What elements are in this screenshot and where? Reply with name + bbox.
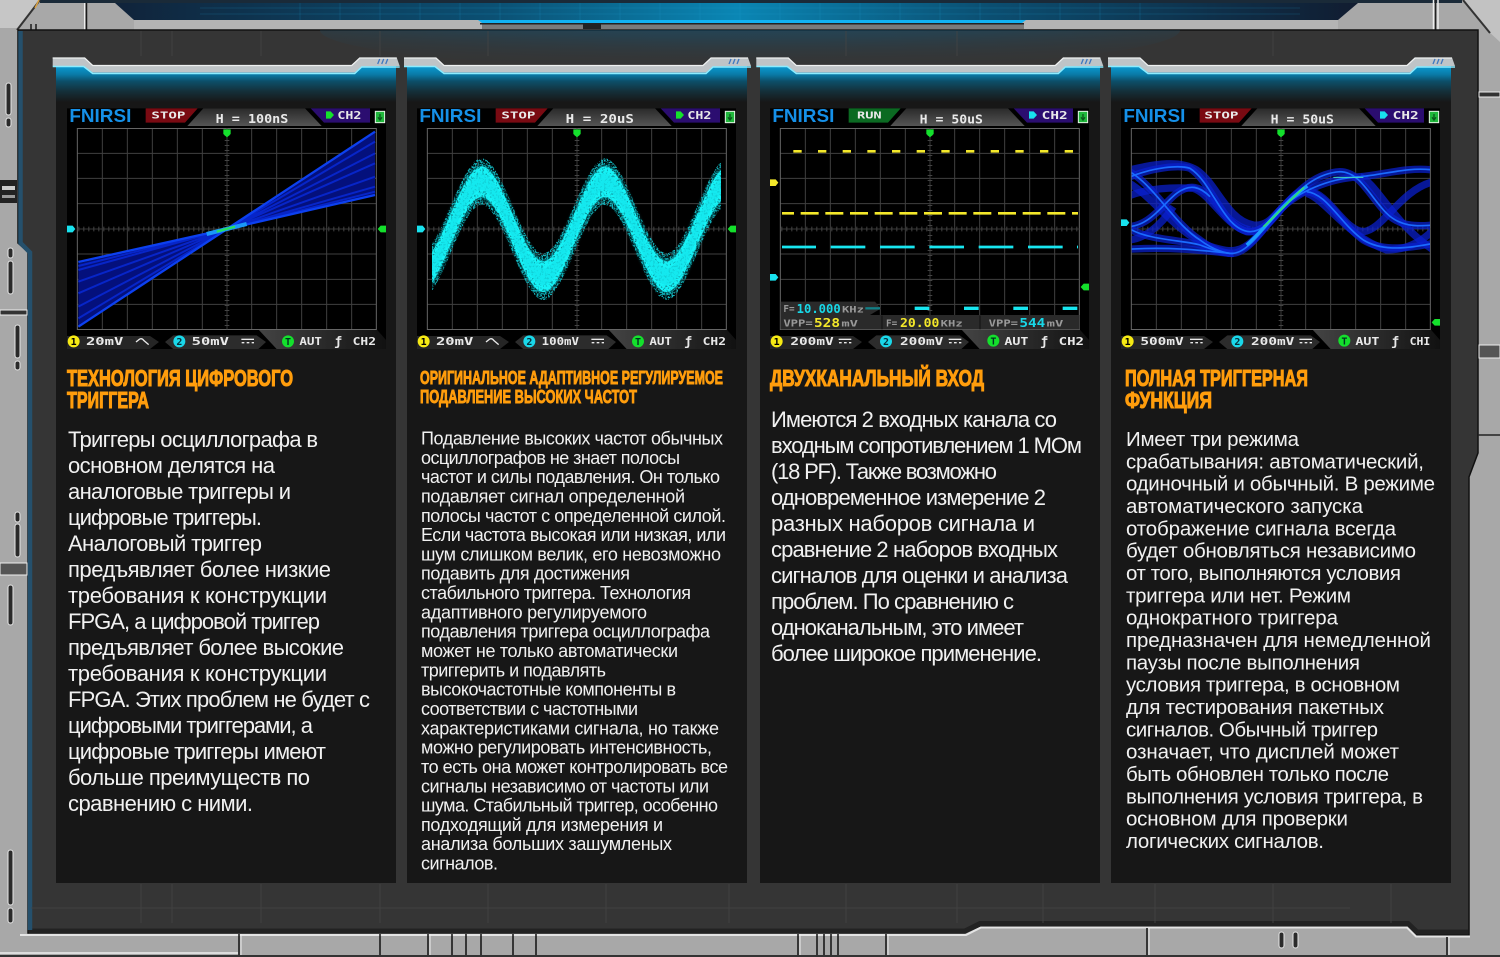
oscilloscope screen: dual channel pulses: F= <box>783 304 795 315</box>
oscilloscope screen: eye pattern: T <box>1341 336 1347 347</box>
body text: сигналы независимо от частоты или <box>421 776 709 796</box>
oscilloscope screen: dual channel pulses: ƒ <box>1040 334 1048 349</box>
body text: адаптивного регулируемого <box>421 602 647 622</box>
body text: Триггеры осциллографа в <box>68 427 318 452</box>
body text: предъявляет более высокие <box>68 635 344 660</box>
body text: цифровые триггеры имеют <box>68 739 326 764</box>
body text: цифровые триггеры. <box>68 505 262 530</box>
oscilloscope screen: noisy sine: ƒ <box>684 334 692 349</box>
body text: можно регулировать интенсивность, <box>421 738 712 758</box>
body text: (18 PF). Также возможно <box>771 459 997 484</box>
body text: подходящий для измерения и <box>421 815 663 835</box>
body text: проблем. По сравнению с <box>771 589 1014 614</box>
oscilloscope screen: noisy sine: AUT <box>649 335 672 348</box>
oscilloscope screen: noisy sine: T <box>635 337 641 348</box>
oscilloscope screen: dual channel pulses: 528 <box>814 315 840 330</box>
body text: Имеются 2 входных канала со <box>771 407 1057 432</box>
body text: основном для проверки <box>1126 808 1348 831</box>
oscilloscope screen: dual channel pulses: mV <box>1047 320 1064 330</box>
oscilloscope screen: trigger wedge: T <box>285 337 291 348</box>
oscilloscope screen: noisy sine: 100mV <box>542 335 580 348</box>
body text: сигналов для оценки и анализа <box>771 563 1069 588</box>
oscilloscope screen: eye pattern: ƒ <box>1391 334 1399 349</box>
oscilloscope screen: trigger wedge <box>67 105 386 349</box>
oscilloscope screen: trigger wedge: CH2 <box>353 335 376 348</box>
oscilloscope screen: noisy sine: H = 20uS <box>566 112 634 126</box>
body text: аналоговые триггеры и <box>68 479 291 504</box>
body text: цифровыми триггерами, а <box>68 713 314 738</box>
oscilloscope screen: trigger wedge: ƒ <box>334 334 342 349</box>
body text: шума. Стабильный триггер, особенно <box>421 796 718 816</box>
oscilloscope screen: eye pattern <box>1121 105 1440 349</box>
oscilloscope screen: noisy sine: STOP <box>501 110 535 121</box>
body text: шум слишком велик, его невозможно <box>421 544 721 564</box>
heading: ДВУХКАНАЛЬНЫЙ ВХОД <box>770 364 984 391</box>
heading: ПОДАВЛЕНИЕ ВЫСОКИХ ЧАСТОТ <box>420 387 637 407</box>
oscilloscope screen: trigger wedge: STOP <box>151 110 185 121</box>
body text: сравнение 2 наборов входных <box>771 537 1058 562</box>
heading: ТЕХНОЛОГИЯ ЦИФРОВОГО <box>67 365 293 391</box>
oscilloscope screen: dual channel pulses: 544 <box>1019 315 1046 330</box>
body text: более широкое применение. <box>771 641 1042 666</box>
body text: от того, выполняются условия <box>1126 562 1401 585</box>
oscilloscope screen: eye pattern: 200mV <box>1251 335 1295 348</box>
body text: предъявляет более низкие <box>68 557 331 582</box>
oscilloscope screen: eye pattern: AUT <box>1355 335 1379 348</box>
oscilloscope screen: trigger wedge: FNIRSI <box>69 105 131 126</box>
body text: автоматического запуска <box>1126 495 1364 518</box>
body text: то есть она может контролировать все <box>421 757 728 777</box>
body text: частот и силы подавления. Он только <box>421 467 720 487</box>
body text: одиночный и обычный. В режиме <box>1126 473 1435 496</box>
body text <box>421 428 728 874</box>
panel: digital trigger technology <box>53 58 400 883</box>
oscilloscope screen: dual channel pulses: 200mV <box>900 335 944 348</box>
oscilloscope screen: dual channel pulses: CH2 <box>1042 109 1068 122</box>
oscilloscope screen: noisy sine: 20mV <box>436 335 474 348</box>
heading: ОРИГИНАЛЬНОЕ АДАПТИВНОЕ РЕГУЛИРУЕМОЕ <box>420 368 723 388</box>
body text: Подавление высоких частот обычных <box>421 428 723 448</box>
oscilloscope screen: dual channel pulses: 10.000 <box>797 301 841 316</box>
body text <box>1126 428 1435 853</box>
oscilloscope screen: dual channel pulses: KHz <box>941 320 963 330</box>
body text: FPGA, а цифровой триггер <box>68 609 320 634</box>
body text: подавить для достижения <box>421 564 630 584</box>
heading: ТРИГГЕРА <box>67 387 149 413</box>
oscilloscope screen: trigger wedge: H = 100nS <box>216 112 288 126</box>
heading: ФУНКЦИЯ <box>1125 387 1212 413</box>
body text: предназначен для немедленной <box>1126 629 1431 652</box>
body text: анализа больших зашумленых <box>421 834 672 854</box>
body text: осциллографов не знает полосы <box>421 448 680 468</box>
oscilloscope screen: noisy sine: 1 <box>421 337 427 348</box>
oscilloscope screen: eye pattern: STOP <box>1204 110 1238 121</box>
heading <box>1125 365 1308 413</box>
body text: логических сигналов. <box>1126 830 1324 853</box>
body text <box>771 407 1082 666</box>
body text: требования к конструкции <box>68 661 327 686</box>
oscilloscope screen: dual channel pulses: F= <box>886 319 898 330</box>
oscilloscope screen: trigger wedge: 1 <box>71 337 77 348</box>
body text: основном делятся на <box>68 453 276 478</box>
body text: паузы после выполнения <box>1126 651 1360 674</box>
body text: Если частота высокая или низкая, или <box>421 525 726 545</box>
body text: подавляет сигнал определенной <box>421 486 685 506</box>
oscilloscope screen: trigger wedge: AUT <box>299 335 322 348</box>
panel: adaptive high-frequency rejection <box>404 58 751 883</box>
oscilloscope screen: eye pattern: H = 50uS <box>1271 113 1334 127</box>
body text <box>68 427 370 816</box>
oscilloscope screen: noisy sine <box>417 105 736 349</box>
oscilloscope screen: noisy sine: FNIRSI <box>419 105 481 126</box>
body text: одноканальным, это имеет <box>771 615 1024 640</box>
body text: требования к конструкции <box>68 583 327 608</box>
oscilloscope screen: dual channel pulses: T <box>990 336 996 347</box>
body text: однократного триггера <box>1126 607 1339 630</box>
body text: высокочастотные компоненты в <box>421 680 676 700</box>
oscilloscope screen: trigger wedge: CH2 <box>337 109 361 122</box>
body text: сигналов. <box>421 854 498 874</box>
oscilloscope screen: trigger wedge: 50mV <box>192 335 230 348</box>
oscilloscope screen: eye pattern: CHI <box>1410 335 1430 348</box>
oscilloscope screen: dual channel pulses: 200mV <box>790 335 834 348</box>
body text: характеристиками сигнала, но также <box>421 718 719 738</box>
oscilloscope screen: noisy sine: 2 <box>526 337 532 348</box>
body text: для тестирования пакетных <box>1126 696 1385 719</box>
body text: сравнению с ними. <box>68 791 253 816</box>
oscilloscope screen: trigger wedge: 20mV <box>86 335 124 348</box>
body text: больше преимуществ по <box>68 765 310 790</box>
body text: триггера или нет. Режим <box>1126 584 1351 607</box>
panel: full trigger function <box>1108 58 1455 883</box>
oscilloscope screen: noisy sine: CH2 <box>687 109 711 122</box>
body text: сигналов. Обычный триггер <box>1126 718 1378 741</box>
body text: подавления триггера осциллографа <box>421 622 711 642</box>
body text: быть обновлен только после <box>1126 763 1389 786</box>
body text: будет обновляться независимо <box>1126 540 1416 563</box>
body text: условия триггера, в основном <box>1126 674 1400 697</box>
body text: выполнения условия триггера, в <box>1126 785 1423 808</box>
oscilloscope screen: dual channel pulses <box>770 105 1089 349</box>
body text: соответствии с частотными <box>421 699 638 719</box>
oscilloscope screen: dual channel pulses: H = 50uS <box>920 113 983 127</box>
oscilloscope screen: dual channel pulses: VPP= <box>989 319 1018 330</box>
heading: ПОЛНАЯ ТРИГГЕРНАЯ <box>1125 365 1308 391</box>
oscilloscope screen: dual channel pulses: RUN <box>857 110 882 121</box>
heading <box>420 368 723 407</box>
oscilloscope screen: dual channel pulses: KHz <box>842 305 864 315</box>
oscilloscope screen: eye pattern: FNIRSI <box>1123 105 1185 126</box>
body text: Имеет три режима <box>1126 428 1300 451</box>
panel: dual channel input <box>756 58 1103 883</box>
body text: триггерить и подавлять <box>421 660 606 680</box>
oscilloscope screen: eye pattern: CH2 <box>1393 109 1419 122</box>
oscilloscope screen: dual channel pulses: 2 <box>883 337 889 348</box>
oscilloscope screen: dual channel pulses: CH2 <box>1059 335 1084 348</box>
oscilloscope screen: dual channel pulses: FNIRSI <box>772 105 834 126</box>
body text: разных наборов сигнала и <box>771 511 1035 536</box>
body text: одновременное измерение 2 <box>771 485 1046 510</box>
oscilloscope screen: trigger wedge: 2 <box>176 337 182 348</box>
oscilloscope screen: dual channel pulses: 1 <box>774 337 780 348</box>
oscilloscope screen: dual channel pulses: 20.00 <box>900 315 939 330</box>
body text: стабильного триггера. Технология <box>421 583 691 603</box>
body text: Аналоговый триггер <box>68 531 262 556</box>
oscilloscope screen: dual channel pulses: mV <box>841 320 859 330</box>
oscilloscope screen: noisy sine: CH2 <box>703 335 726 348</box>
oscilloscope screen: dual channel pulses: VPP= <box>783 319 813 330</box>
oscilloscope screen: eye pattern: 500mV <box>1140 335 1184 348</box>
oscilloscope screen: eye pattern: 1 <box>1125 337 1131 348</box>
body text: срабатывания: автоматический, <box>1126 450 1424 473</box>
oscilloscope screen: dual channel pulses: AUT <box>1004 335 1028 348</box>
body text: FPGA. Этих проблем не будет с <box>68 687 370 712</box>
oscilloscope screen: eye pattern: 2 <box>1234 337 1240 348</box>
body text: может не только автоматически <box>421 641 678 661</box>
body text: входным сопротивлением 1 МОм <box>771 433 1082 458</box>
body text: означает, что дисплей может <box>1126 741 1400 764</box>
body text: отображение сигнала всегда <box>1126 517 1397 540</box>
body text: полосы частот с определенной силой. <box>421 506 726 526</box>
heading <box>67 365 293 413</box>
